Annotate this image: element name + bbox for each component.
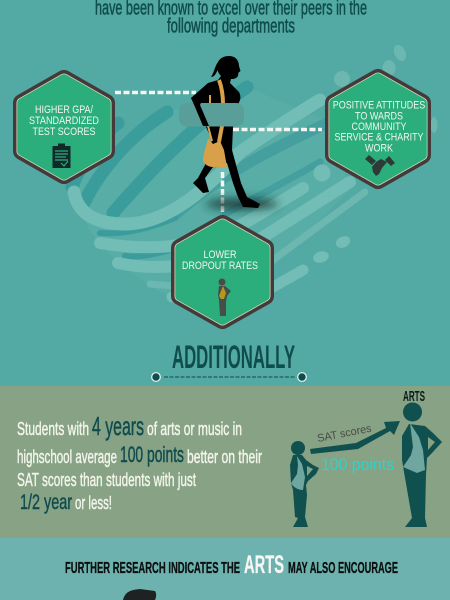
- background swoosh: [72, 43, 438, 300]
- label: DROPOUT RATES: [182, 260, 258, 272]
- heading: ARTS: [244, 551, 284, 579]
- heading: FURTHER RESEARCH INDICATES THE: [65, 560, 240, 577]
- statistic text: 4 years: [92, 411, 144, 441]
- statistic text: highschool average: [17, 447, 117, 467]
- arts student: [402, 402, 442, 527]
- yoga mat band: [179, 103, 244, 126]
- hexagon: lower dropout: [180, 224, 265, 320]
- arts label: ARTS: [403, 388, 425, 405]
- bag strap: [219, 80, 223, 142]
- statistic text: or less!: [75, 493, 112, 513]
- label: [29, 104, 99, 138]
- heading: additionally: ADDITIONALLY: [172, 339, 295, 375]
- connector: dashed lines: [115, 92, 322, 212]
- label: STANDARDIZED: [29, 115, 99, 127]
- title: following departments: [167, 16, 295, 38]
- label: SERVICE & CHARITY: [334, 132, 424, 144]
- statistic text: 1/2 year: [20, 491, 72, 514]
- label: LOWER: [204, 249, 237, 261]
- label: HIGHER GPA/: [35, 104, 94, 116]
- title: [95, 0, 367, 38]
- label: POSITIVE ATTITUDES: [333, 100, 425, 112]
- figure head: [123, 589, 156, 600]
- hexagon: higher GPA: [22, 79, 106, 175]
- statistic text: 100 points: [120, 442, 184, 467]
- chart: SAT comparison figures: [290, 388, 442, 527]
- points label: 100 points: [321, 455, 394, 474]
- statistic text: Students with: [17, 419, 89, 439]
- statistic text: SAT scores than students with just: [17, 470, 196, 490]
- figure shadow: [206, 198, 278, 210]
- growth arrow: [310, 421, 400, 454]
- walking figure: [179, 56, 278, 210]
- divider with end dots: [152, 373, 306, 381]
- forearm: [191, 92, 209, 126]
- bag: [203, 138, 227, 167]
- silhouette: [191, 56, 260, 208]
- heading: [65, 551, 398, 579]
- small student: [290, 441, 319, 527]
- icon: clipboard: [52, 144, 70, 168]
- label: [182, 249, 258, 272]
- label: [333, 100, 425, 154]
- statistic text: of arts or music in: [147, 419, 242, 439]
- panel: SAT band: [0, 386, 450, 538]
- panel: further research: [0, 538, 450, 600]
- icon: student: [218, 278, 231, 316]
- icon: handshake: [365, 155, 395, 176]
- label: TO WARDS: [355, 110, 403, 122]
- hexagon: positive attitudes: [333, 78, 425, 180]
- label: WORK: [365, 142, 394, 154]
- arrow label: SAT scores: [316, 423, 373, 445]
- statistic text: [17, 411, 262, 514]
- label: COMMUNITY: [352, 121, 407, 133]
- label: TEST SCORES: [32, 126, 96, 138]
- statistic text: better on their: [187, 447, 262, 467]
